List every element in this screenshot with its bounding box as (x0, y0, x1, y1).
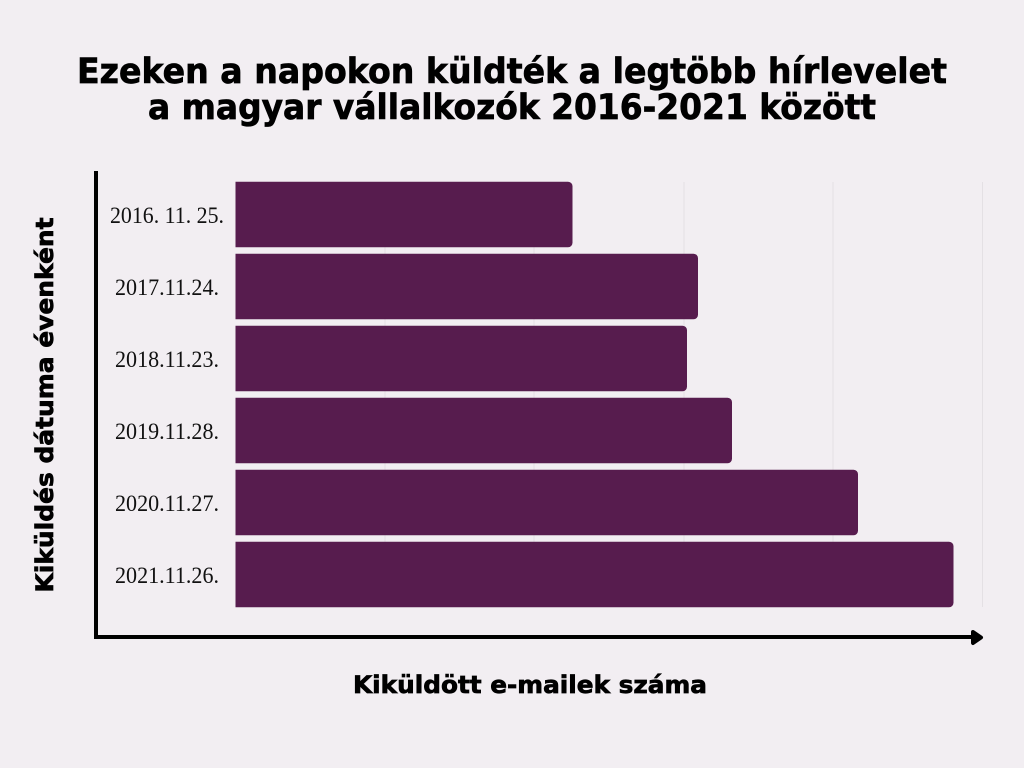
date labels: 2021.11.26. (115, 563, 219, 588)
date labels: 2018.11.23. (115, 347, 219, 372)
bar: 2019 (236, 398, 732, 463)
bar: 2018 (236, 326, 687, 391)
date labels: 2017.11.24. (115, 275, 219, 300)
date labels: 2020.11.27. (115, 491, 219, 516)
date labels (110, 203, 224, 588)
x axis label: Kiküldött e-mailek száma (353, 671, 707, 699)
y axis and x axis arrow (96, 171, 981, 643)
bar: 2016 (236, 182, 572, 247)
title: Ezeken a napokon küldték a legtöbb hírlevelet (77, 52, 947, 92)
bar: 2021 (236, 542, 954, 607)
date labels: 2016. 11. 25. (110, 203, 224, 228)
y axis label: Kiküldés dátuma évenként (31, 218, 59, 592)
date labels: 2019.11.28. (115, 419, 219, 444)
bar chart (236, 182, 954, 607)
title: a magyar vállalkozók 2016-2021 között (148, 88, 876, 128)
bar: 2020 (236, 470, 858, 535)
bar: 2017 (236, 254, 698, 319)
title (77, 52, 947, 128)
